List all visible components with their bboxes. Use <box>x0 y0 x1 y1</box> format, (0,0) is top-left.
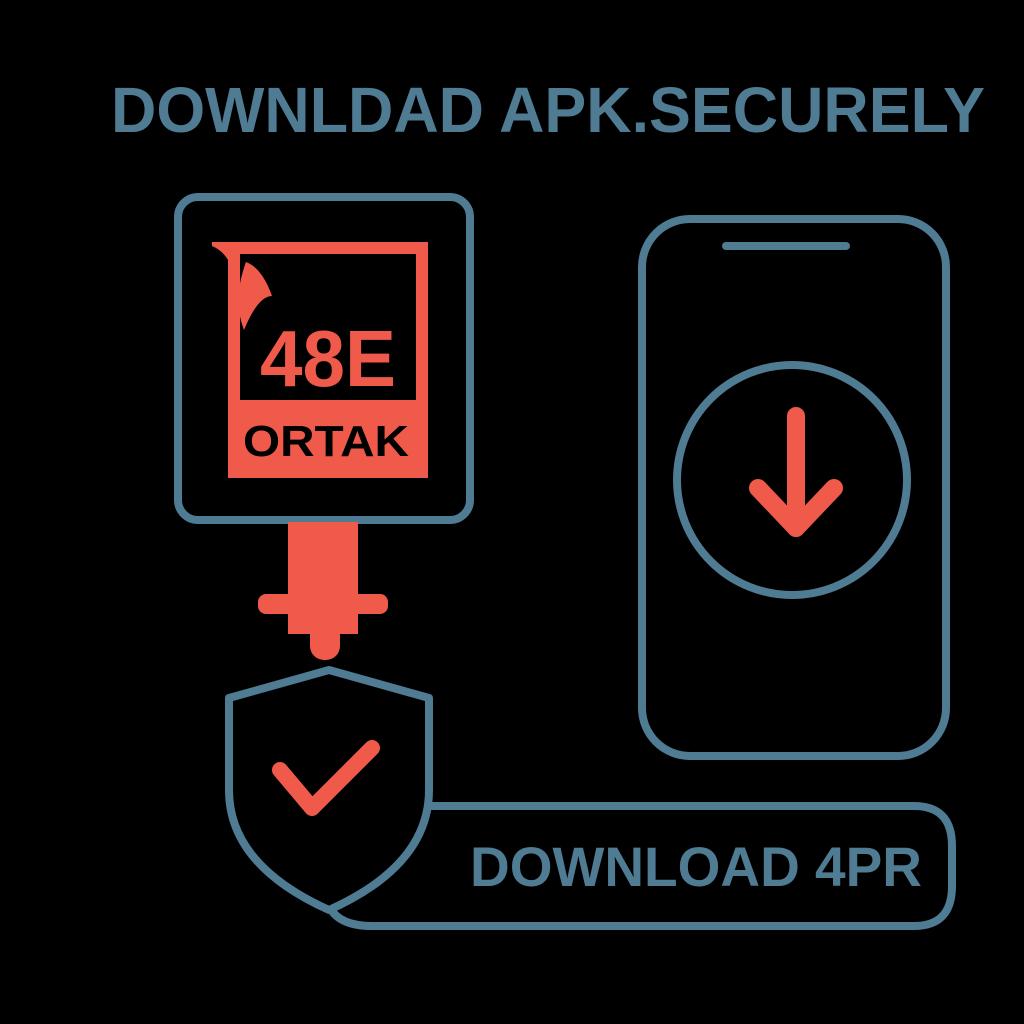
text: 48E: 48E <box>260 314 396 403</box>
panel: APK file card <box>178 197 470 520</box>
text: ORTAK: ORTAK <box>243 417 409 466</box>
icon: shield with check <box>229 670 429 910</box>
icon: apk file <box>212 242 428 478</box>
button: download <box>330 806 952 926</box>
icon: download circle <box>677 365 907 595</box>
text: DOWNLOAD 4PR: DOWNLOAD 4PR <box>470 835 922 898</box>
title: DOWNLDAD APK.SECURELY <box>111 74 985 146</box>
arrow: connector plug <box>258 522 388 660</box>
panel: phone <box>642 219 946 756</box>
